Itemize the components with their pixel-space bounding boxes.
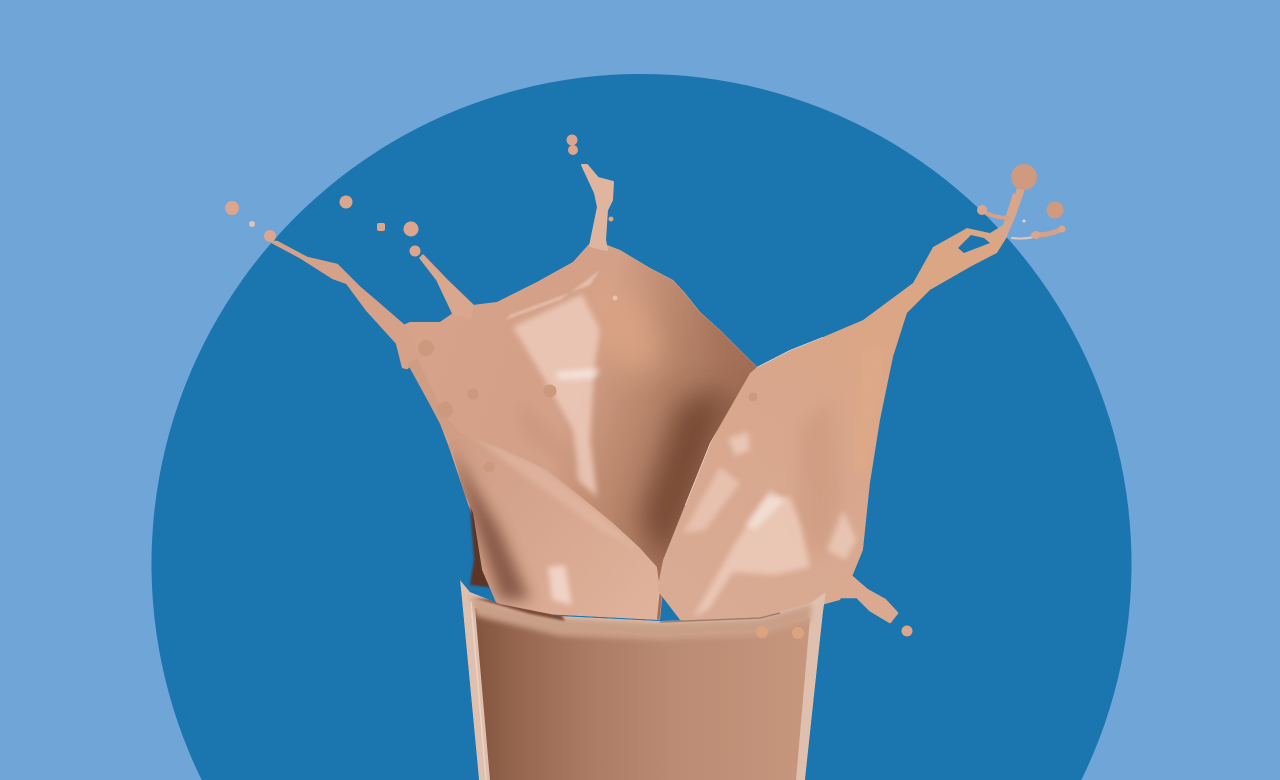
left front lobe [407,358,660,620]
splash loop hole [958,235,990,253]
surface beads [418,296,804,639]
left tendril [272,242,417,368]
right front lobe [657,193,1020,622]
illustration: chocolate milk splash [152,74,1132,780]
dark shadow under left lobe [470,505,512,590]
milk droplets [225,134,1066,636]
middle tendril [420,255,473,318]
back splash lobe [403,243,760,620]
blue circle [151,74,1132,780]
lower right drip [827,577,897,622]
glass of chocolate milk [460,580,826,780]
right stem joining ball [1000,185,1026,238]
centre spike [582,165,613,250]
right tendrils [982,211,1062,238]
